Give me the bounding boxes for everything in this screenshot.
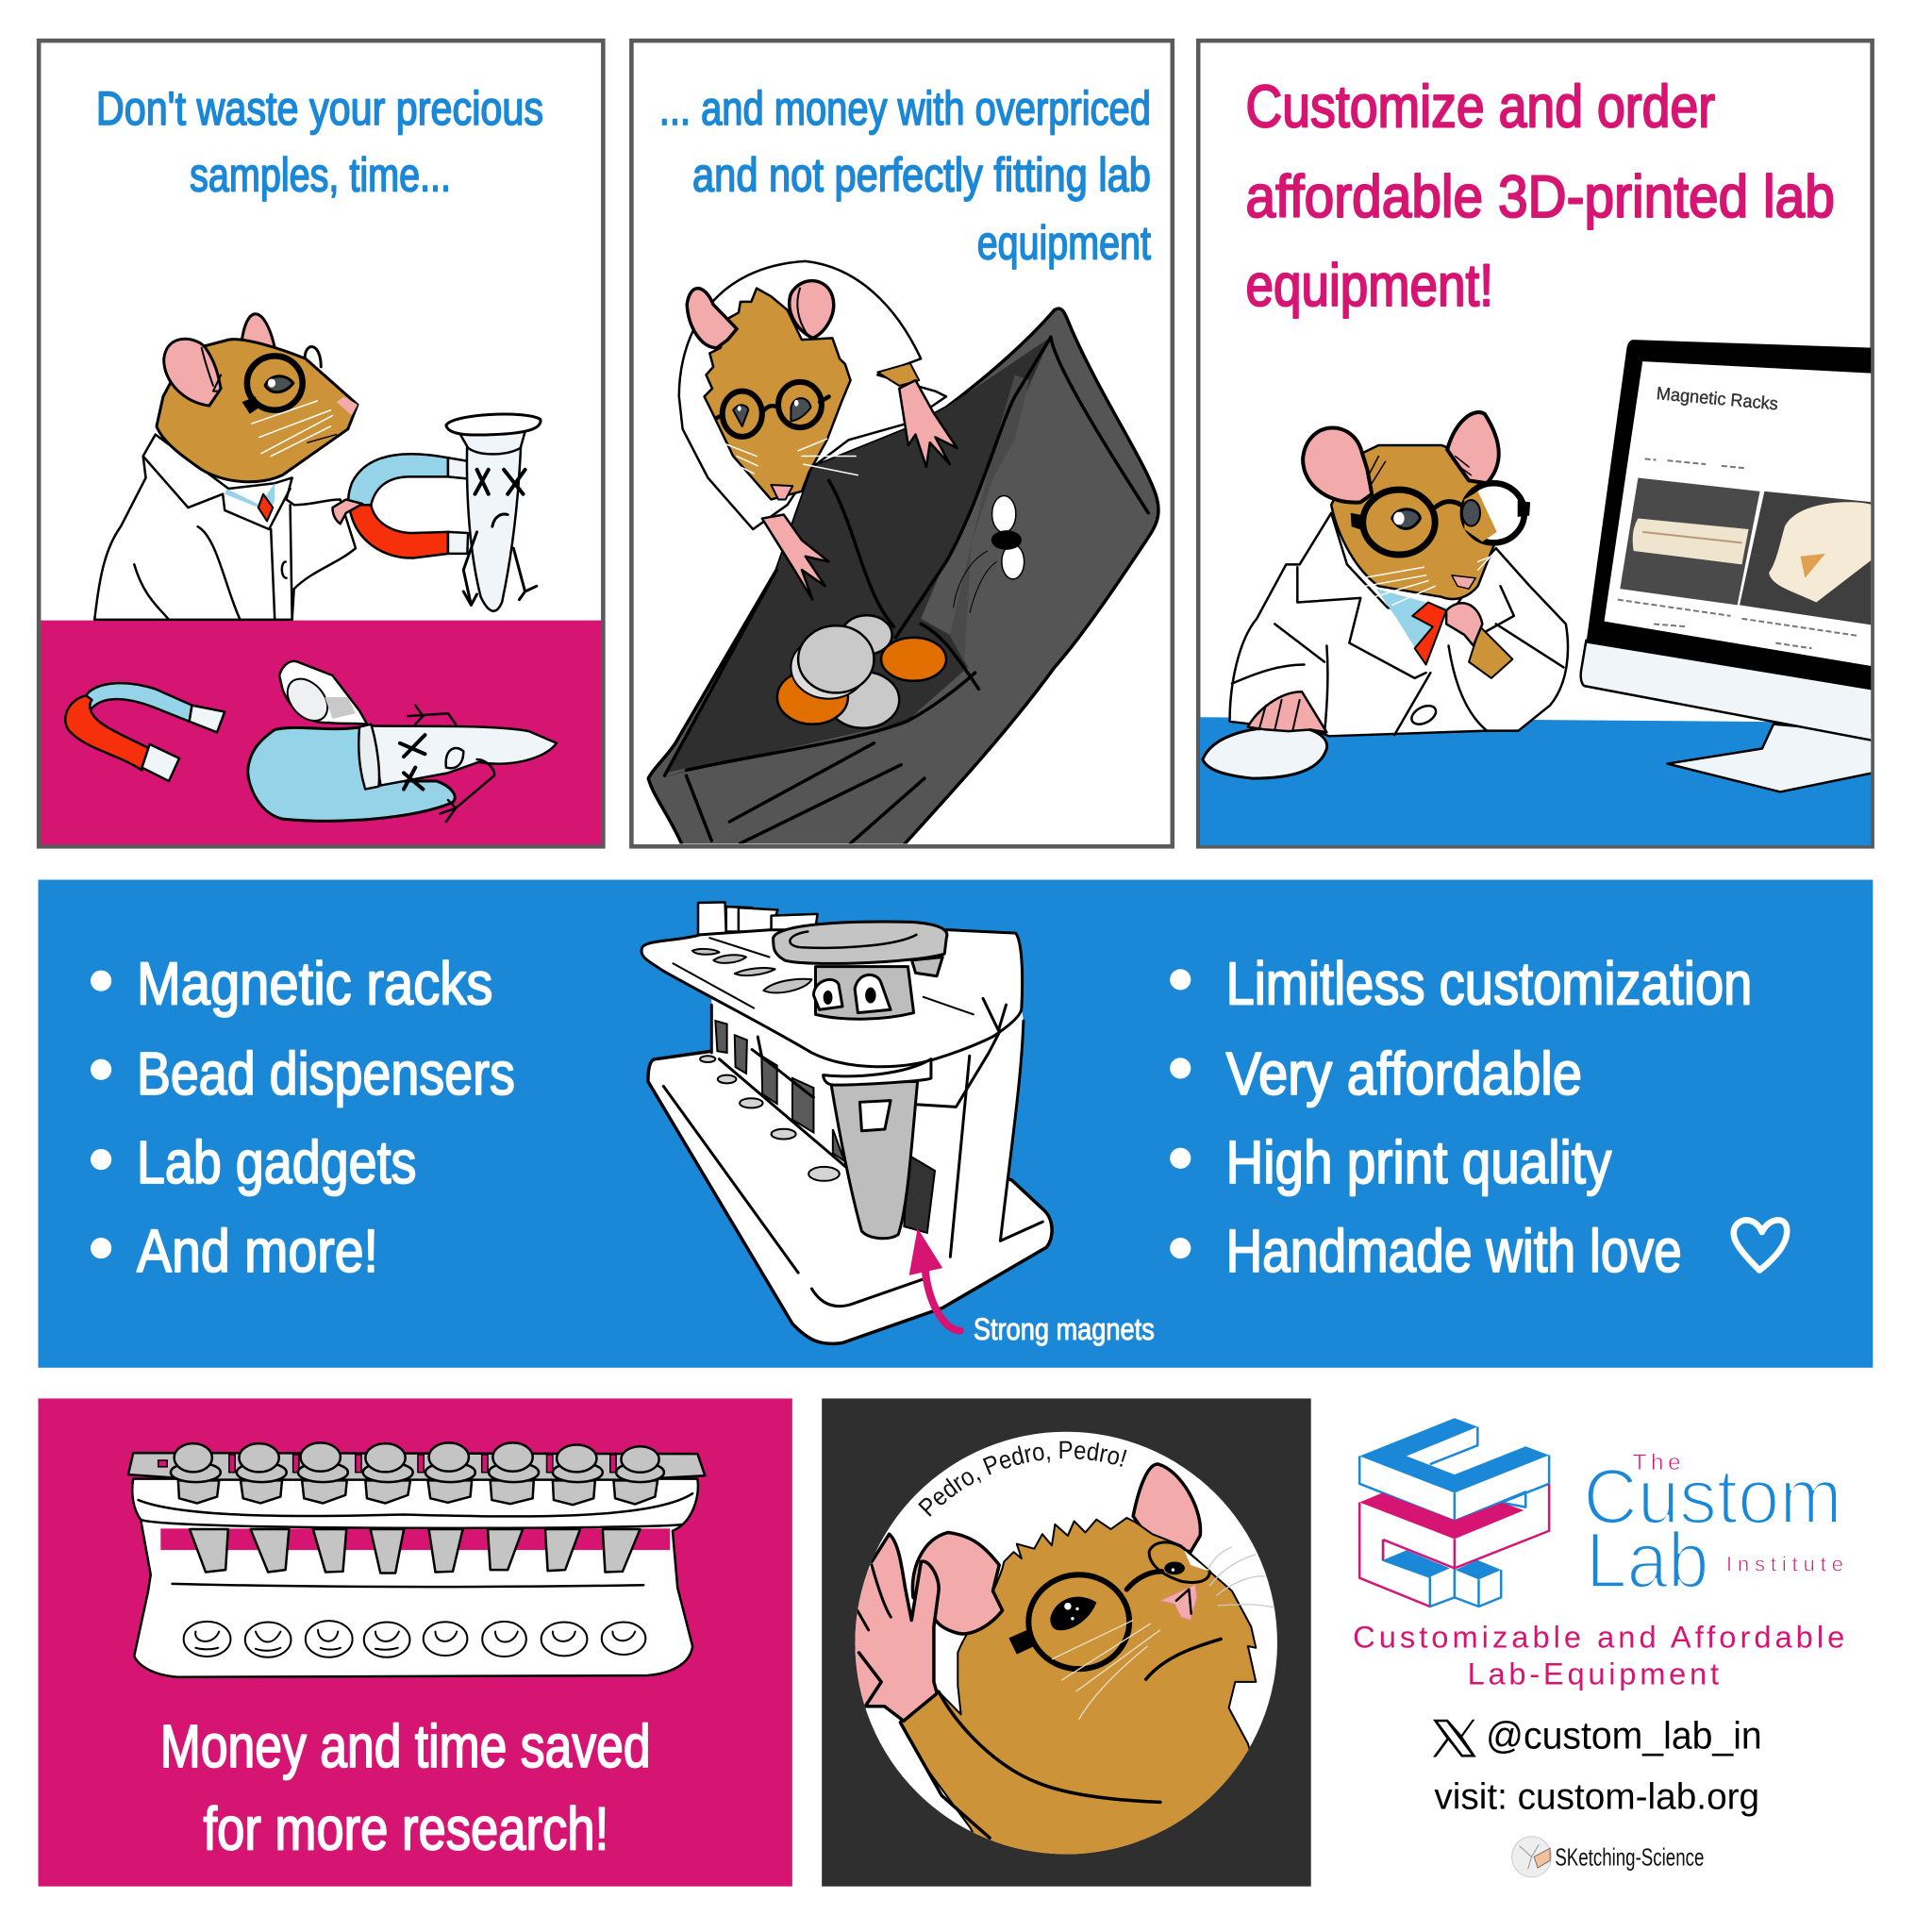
rack tabs: [698, 902, 818, 935]
caption: Money and time saved: [160, 1712, 651, 1780]
rat in lab coat: [1203, 412, 1568, 778]
screen title: Magnetic Racks: [1656, 384, 1779, 414]
speech text: Pedro, Pedro, Pedro!: [929, 1458, 1146, 1518]
illustration: magnetic rack with tube: [641, 902, 1052, 1343]
coins: [777, 615, 946, 728]
icon: heart: [1734, 1220, 1787, 1271]
panel 2 heading: equipment: [977, 216, 1151, 269]
panel: Pedro portrait: Pedro, Pedro, Pedro!: [918, 1441, 1126, 1517]
left list: And more!: [137, 1217, 378, 1285]
left list: Bead dispensers: [137, 1040, 515, 1108]
panel: money and time saved: [38, 1398, 792, 1887]
panel: blue features band: [38, 880, 1873, 1368]
credit: Sketching-Science: [1512, 1837, 1704, 1877]
blue desk: [1200, 717, 1873, 852]
panel 3 heading: Customize and order: [1245, 75, 1715, 141]
moth: [991, 495, 1024, 579]
right list: [1170, 949, 1752, 1285]
magnet on floor: [65, 683, 225, 781]
contact: website: visit: custom-lab.org: [1434, 1776, 1759, 1817]
panel: logo and contacts: [1353, 1418, 1844, 1877]
rat head: [157, 314, 358, 482]
panel 3 heading: affordable 3D-printed lab: [1245, 164, 1835, 230]
icon: X logo: [1433, 1720, 1476, 1757]
wallet: [648, 308, 1158, 846]
panel 3 heading: equipment!: [1245, 253, 1493, 319]
panel 3 heading: [1245, 75, 1835, 319]
caption: [160, 1712, 651, 1862]
sad tube: [446, 414, 541, 611]
logo wordmark: [1583, 1450, 1843, 1604]
left list: Magnetic racks: [137, 949, 492, 1017]
panel: custom 3D printed equipment: [1198, 41, 1873, 852]
panel 2 heading: [659, 82, 1151, 269]
spilled tube: [248, 661, 557, 822]
arrow: strong magnets pointer: [909, 1228, 960, 1331]
monitor: [1581, 340, 1873, 791]
red and blue magnet: [332, 454, 471, 558]
right list: High print quality: [1226, 1128, 1611, 1196]
right list: Very affordable: [1226, 1040, 1582, 1108]
panel 2 heading: and not perfectly fitting lab: [692, 148, 1151, 201]
pink floor: [41, 621, 601, 844]
smiling tube top: [774, 922, 947, 1019]
contact: X handle: @custom_lab_in: [1486, 1713, 1762, 1757]
right list: Handmade with love: [1226, 1217, 1682, 1285]
illustration: rat browsing at monitor: [1200, 340, 1873, 852]
left list: [91, 949, 515, 1285]
logo wordmark: Custom: [1583, 1454, 1842, 1540]
panel 1 heading: samples, time...: [190, 148, 451, 201]
panel: wasted money: [631, 41, 1173, 846]
panel: Pedro portrait: [822, 1398, 1311, 1887]
right list: Limitless customization: [1226, 949, 1752, 1017]
label: strong magnets: Strong magnets: [974, 1311, 1155, 1346]
illustration: rat scientist with magnet and sad tube: [65, 314, 557, 822]
panel: wasted samples: [39, 41, 603, 846]
round portrait: [849, 1432, 1283, 1867]
panel 1 heading: [96, 82, 543, 201]
illustration: rat opening empty wallet: [648, 261, 1158, 846]
rat in coat: [679, 261, 957, 600]
panel 2 heading: ... and money with overpriced: [659, 82, 1151, 135]
logo wordmark: Institute: [1726, 1552, 1843, 1575]
left list: Lab gadgets: [137, 1128, 416, 1196]
panel 1 heading: Don't waste your precious: [96, 82, 543, 135]
illustration: strip tube rack: [128, 1442, 705, 1677]
credit: Sketching-Science: SKetching-Science: [1555, 1842, 1704, 1871]
logo wordmark: The: [1633, 1450, 1681, 1475]
caption: for more research!: [204, 1794, 608, 1862]
logo wordmark: Lab: [1586, 1515, 1709, 1604]
logo: isometric CL mark: [1359, 1418, 1549, 1607]
tagline: Lab-Equipment: [1468, 1656, 1719, 1690]
tagline: [1353, 1619, 1844, 1690]
tagline: Customizable and Affordable: [1353, 1619, 1844, 1654]
